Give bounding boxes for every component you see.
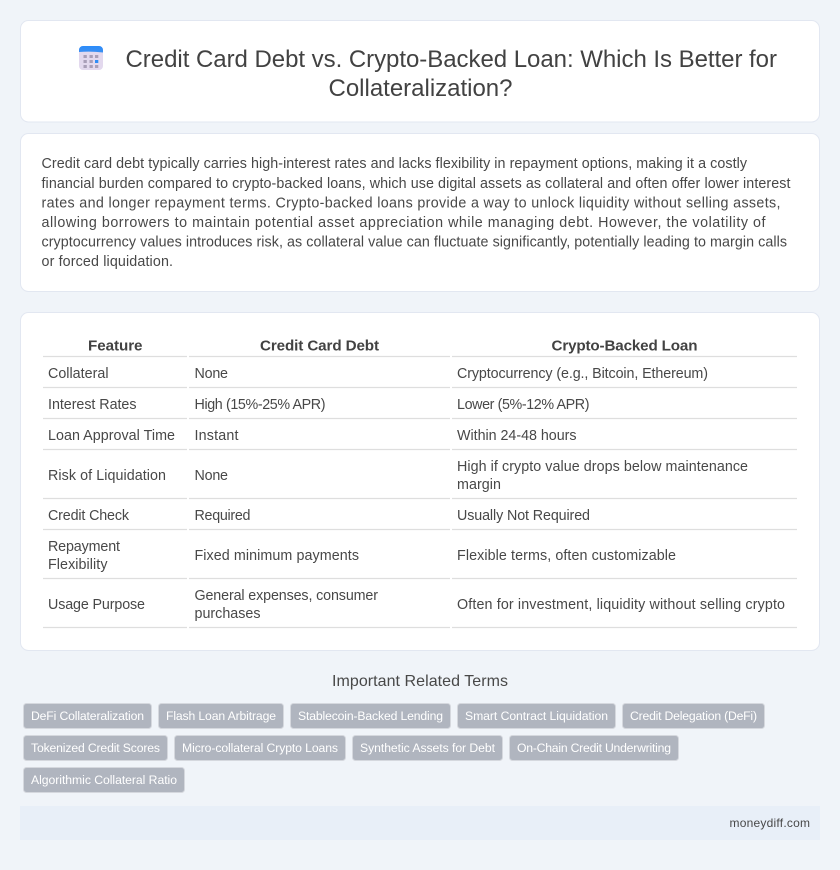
tag: On-Chain Credit Underwriting	[510, 736, 678, 760]
tag: Flash Loan Arbitrage: Flash Loan Arbitrage	[166, 709, 276, 723]
row: usage purpose: Often for investment, liquidity without selling crypto	[457, 597, 785, 613]
row: interest rates: High (15%-25% APR)	[194, 397, 326, 413]
text block: summary paragraph: or forced liquidation.	[42, 254, 173, 270]
panel: header	[20, 20, 820, 122]
row: usage purpose: Usage Purpose	[48, 597, 145, 613]
row: usage purpose: purchases	[194, 606, 260, 622]
panel: summary	[20, 134, 820, 292]
row: credit check	[48, 508, 590, 524]
tag: Tokenized Credit Scores	[24, 736, 168, 760]
text block: summary paragraph: allowing borrowers to maintain potential asset appreciation while managing debt. However, the volatility of	[42, 215, 766, 231]
tag: On-Chain Credit Underwriting: On-Chain Credit Underwriting	[517, 741, 671, 755]
tag: Flash Loan Arbitrage	[158, 704, 284, 728]
tag list	[24, 704, 764, 792]
row: repayment flexibility: Flexible terms, often customizable	[457, 548, 676, 564]
row: credit check: Usually Not Required	[457, 508, 590, 524]
row: risk of liquidation	[48, 459, 748, 493]
table header: Credit Card Debt	[260, 338, 379, 354]
row: collateral: None	[194, 366, 228, 382]
row: collateral: Cryptocurrency (e.g., Bitcoin, Ethereum)	[457, 366, 708, 382]
row: interest rates	[48, 397, 590, 413]
tag: Credit Delegation (DeFi): Credit Delegation (DeFi)	[630, 709, 757, 723]
row: collateral	[48, 366, 708, 382]
row: repayment flexibility: Flexibility	[48, 557, 108, 573]
tag: Tokenized Credit Scores: Tokenized Credit Scores	[31, 741, 160, 755]
row: loan approval time: Within 24-48 hours	[457, 428, 576, 444]
row: credit check: Required	[194, 508, 251, 524]
tag: DeFi Collateralization: DeFi Collateralization	[31, 709, 144, 723]
text block: summary paragraph: rates and longer repayment terms. Crypto-backed loans provide a way to unlock liquidity without selling assets,	[42, 196, 780, 212]
row: usage purpose	[48, 588, 785, 622]
footer	[20, 806, 820, 840]
tag: Micro-collateral Crypto Loans: Micro-collateral Crypto Loans	[182, 741, 338, 755]
panel: comparison table	[20, 312, 820, 650]
table header: Feature	[88, 338, 142, 354]
row: loan approval time: Instant	[194, 428, 239, 444]
tag: Synthetic Assets for Debt: Synthetic Assets for Debt	[360, 741, 496, 755]
table header	[88, 338, 698, 354]
row: risk of liquidation: None	[194, 468, 228, 484]
icon: calendar	[79, 46, 103, 70]
row: credit check: Credit Check	[48, 508, 130, 524]
tag: Micro-collateral Crypto Loans	[174, 736, 346, 760]
tag: Smart Contract Liquidation	[458, 704, 616, 728]
table header: Crypto-Backed Loan	[552, 338, 698, 354]
row: loan approval time: Loan Approval Time	[48, 428, 175, 444]
row: repayment flexibility	[48, 539, 676, 573]
tag: Algorithmic Collateral Ratio	[24, 768, 184, 792]
tag: Stablecoin-Backed Lending	[290, 704, 450, 728]
row: usage purpose: General expenses, consumer	[194, 588, 378, 604]
tag: Synthetic Assets for Debt	[352, 736, 502, 760]
tag: DeFi Collateralization	[24, 704, 152, 728]
text block: summary paragraph: Credit card debt typically carries high-interest rates and lacks flexibility in repayment options, making it a costly	[42, 156, 748, 172]
tag: Stablecoin-Backed Lending: Stablecoin-Backed Lending	[298, 709, 443, 723]
heading: important related terms: Important Related Terms	[332, 673, 508, 690]
tag: Algorithmic Collateral Ratio: Algorithmic Collateral Ratio	[31, 773, 177, 787]
row: repayment flexibility: Repayment	[48, 539, 120, 555]
row: interest rates: Lower (5%-12% APR)	[457, 397, 590, 413]
title: Credit Card Debt vs. Crypto-Backed Loan: Which Is Better for	[126, 46, 777, 73]
text block: summary paragraph	[42, 156, 791, 270]
row: loan approval time	[48, 428, 576, 444]
row: repayment flexibility: Fixed minimum payments	[194, 548, 359, 564]
title: Collateralization?	[328, 75, 512, 102]
row: risk of liquidation: Risk of Liquidation	[48, 468, 166, 484]
row: collateral: Collateral	[48, 366, 108, 382]
tag: Smart Contract Liquidation: Smart Contract Liquidation	[465, 709, 608, 723]
footer: moneydiff.com	[730, 816, 810, 830]
tag: Credit Delegation (DeFi)	[622, 704, 764, 728]
row: risk of liquidation: High if crypto value drops below maintenance	[457, 459, 748, 475]
text block: summary paragraph: cryptocurrency values introduces risk, as collateral value can fluctuate significantly, potentially leading to margin calls	[42, 234, 787, 250]
title	[126, 46, 777, 102]
row: risk of liquidation: margin	[457, 477, 501, 493]
text block: summary paragraph: financial burden compared to crypto-backed loans, which use digital assets as collateral and often offer lower interest	[42, 176, 791, 192]
row: interest rates: Interest Rates	[48, 397, 136, 413]
